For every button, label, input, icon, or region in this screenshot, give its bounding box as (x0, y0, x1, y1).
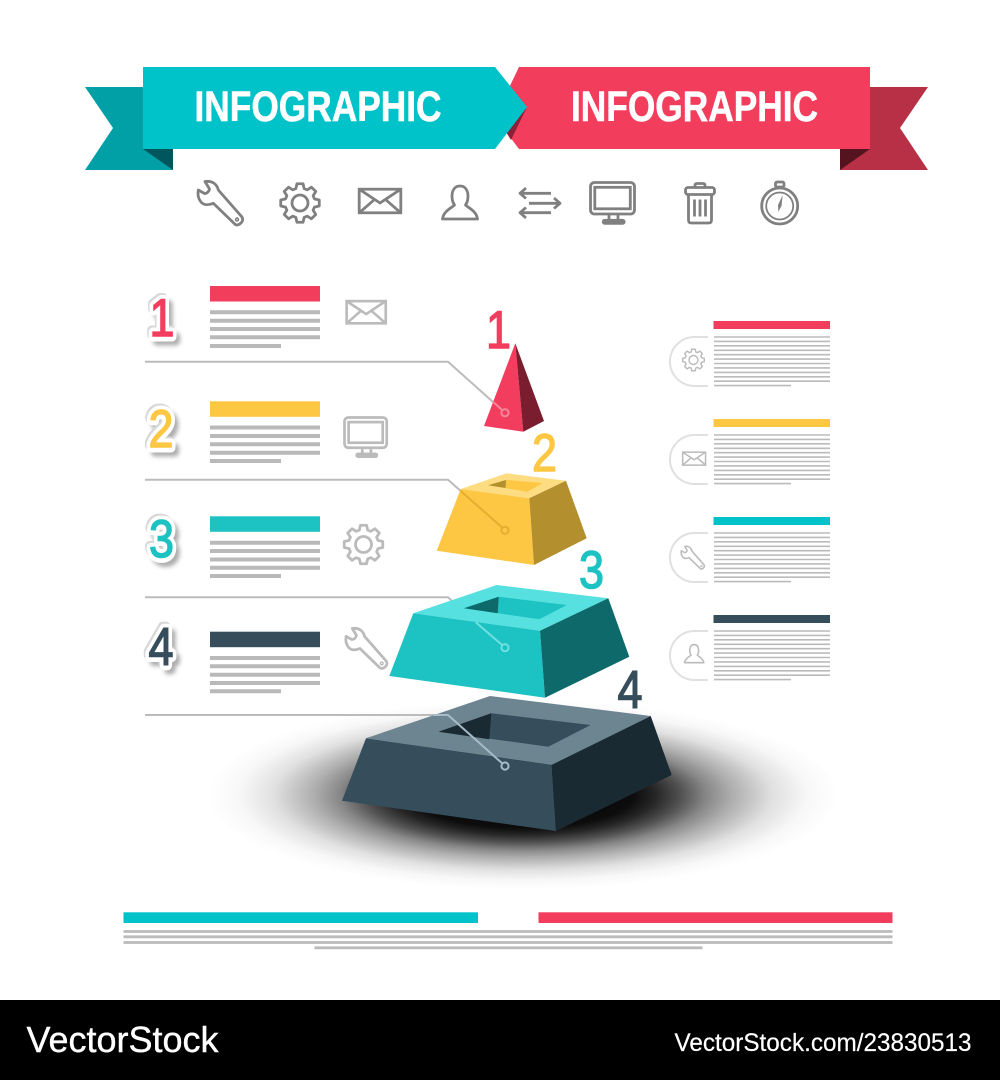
top icon row (198, 181, 798, 225)
icon: arrows (520, 188, 560, 218)
dot: layer 2 (461, 491, 509, 534)
image url: VectorStock.com/23830513 (674, 1029, 972, 1057)
sticker number 2: 2 (147, 398, 172, 458)
ground shadow (207, 700, 839, 890)
black band (0, 1000, 1000, 1080)
sticker number 1: 1 (154, 294, 178, 353)
icon: stopwatch compass (762, 182, 798, 224)
heading bar (714, 419, 830, 427)
heading bar (714, 615, 830, 623)
right list panel (670, 321, 830, 680)
sticker number 1: 1 (148, 288, 173, 346)
text lines (210, 543, 320, 576)
pill outline (670, 337, 708, 386)
teal banner (143, 67, 527, 149)
right ribbon tail (840, 87, 928, 170)
pyramid number labels (486, 301, 642, 720)
text lines (210, 658, 320, 691)
heading bar (210, 401, 320, 417)
sticker number 3: 3 (149, 510, 174, 569)
layer 1: red tip (484, 343, 544, 432)
label 4: 4 (618, 661, 642, 720)
right block 4 (670, 615, 830, 680)
sticker number 3: 3 (149, 510, 174, 570)
list item 2 (147, 398, 387, 464)
text lines (714, 631, 830, 680)
label 3: 3 (579, 541, 604, 600)
teal banner: INFOGRAPHIC (194, 83, 442, 131)
text lines (714, 435, 830, 484)
label 1: 1 (486, 301, 511, 360)
sticker number 2: 2 (148, 400, 174, 459)
dot: layer 4 (433, 715, 509, 770)
list item 4 (147, 616, 387, 691)
brand name: VectorStock (26, 1019, 219, 1060)
layer 2: yellow (437, 473, 587, 565)
icon: monitor (344, 418, 387, 457)
right block 1 (670, 321, 830, 386)
heading bar (210, 286, 320, 302)
sticker number 4: 4 (152, 623, 178, 682)
leader lines (145, 362, 505, 715)
heading bar (714, 517, 830, 525)
right block 2 (670, 419, 830, 484)
text lines (714, 337, 830, 386)
sticker number 1: 1 (150, 289, 174, 348)
heading bar (210, 632, 320, 647)
icon: wrench (346, 628, 387, 668)
dot: layer 3 (476, 622, 509, 651)
red banner (506, 67, 870, 149)
bottom text block (124, 912, 892, 948)
left list panel (147, 286, 387, 691)
icon: gear (281, 184, 319, 222)
sticker number 2: 2 (148, 400, 174, 460)
heading bar (210, 516, 320, 532)
sticker number 4: 4 (148, 618, 174, 678)
header ribbon (85, 67, 928, 170)
heading bar (714, 321, 830, 329)
red bar (538, 912, 892, 923)
icon: gear (344, 525, 383, 564)
icon: trash can (686, 184, 714, 223)
pill outline (670, 631, 708, 680)
sticker number 1: 1 (150, 290, 174, 348)
footer watermark bar (0, 1000, 1000, 1080)
list item 1 (148, 286, 386, 353)
pyramid (342, 343, 672, 831)
dot: layer 1 (493, 402, 509, 416)
sticker number 2: 2 (152, 405, 178, 464)
teal bar (124, 912, 478, 923)
icon: envelope (347, 301, 386, 323)
icon: wrench (198, 181, 243, 225)
text lines (124, 932, 892, 948)
layer 3: teal (389, 585, 629, 698)
icon: monitor (590, 182, 634, 223)
text lines (210, 428, 320, 461)
pill outline (670, 435, 708, 484)
icon: gear (683, 349, 704, 371)
icon: envelope (359, 189, 401, 213)
sticker number 3: 3 (153, 515, 178, 574)
label 2: 2 (532, 424, 557, 483)
leader overlays and dots (433, 402, 509, 770)
icon: person (685, 645, 704, 663)
left ribbon tail (85, 87, 173, 170)
icon: person (442, 186, 478, 219)
layer 4: dark base (342, 696, 672, 831)
red banner: INFOGRAPHIC (571, 83, 818, 131)
right block 3 (670, 517, 830, 582)
icon: envelope (683, 452, 706, 465)
list item 3 (148, 508, 383, 576)
pill outline (670, 533, 708, 582)
sticker number 4: 4 (147, 616, 172, 676)
text lines (210, 312, 320, 346)
text lines (714, 533, 830, 582)
icon: wrench (681, 546, 704, 569)
sticker number 4: 4 (148, 618, 174, 677)
sticker number 3: 3 (148, 508, 172, 568)
